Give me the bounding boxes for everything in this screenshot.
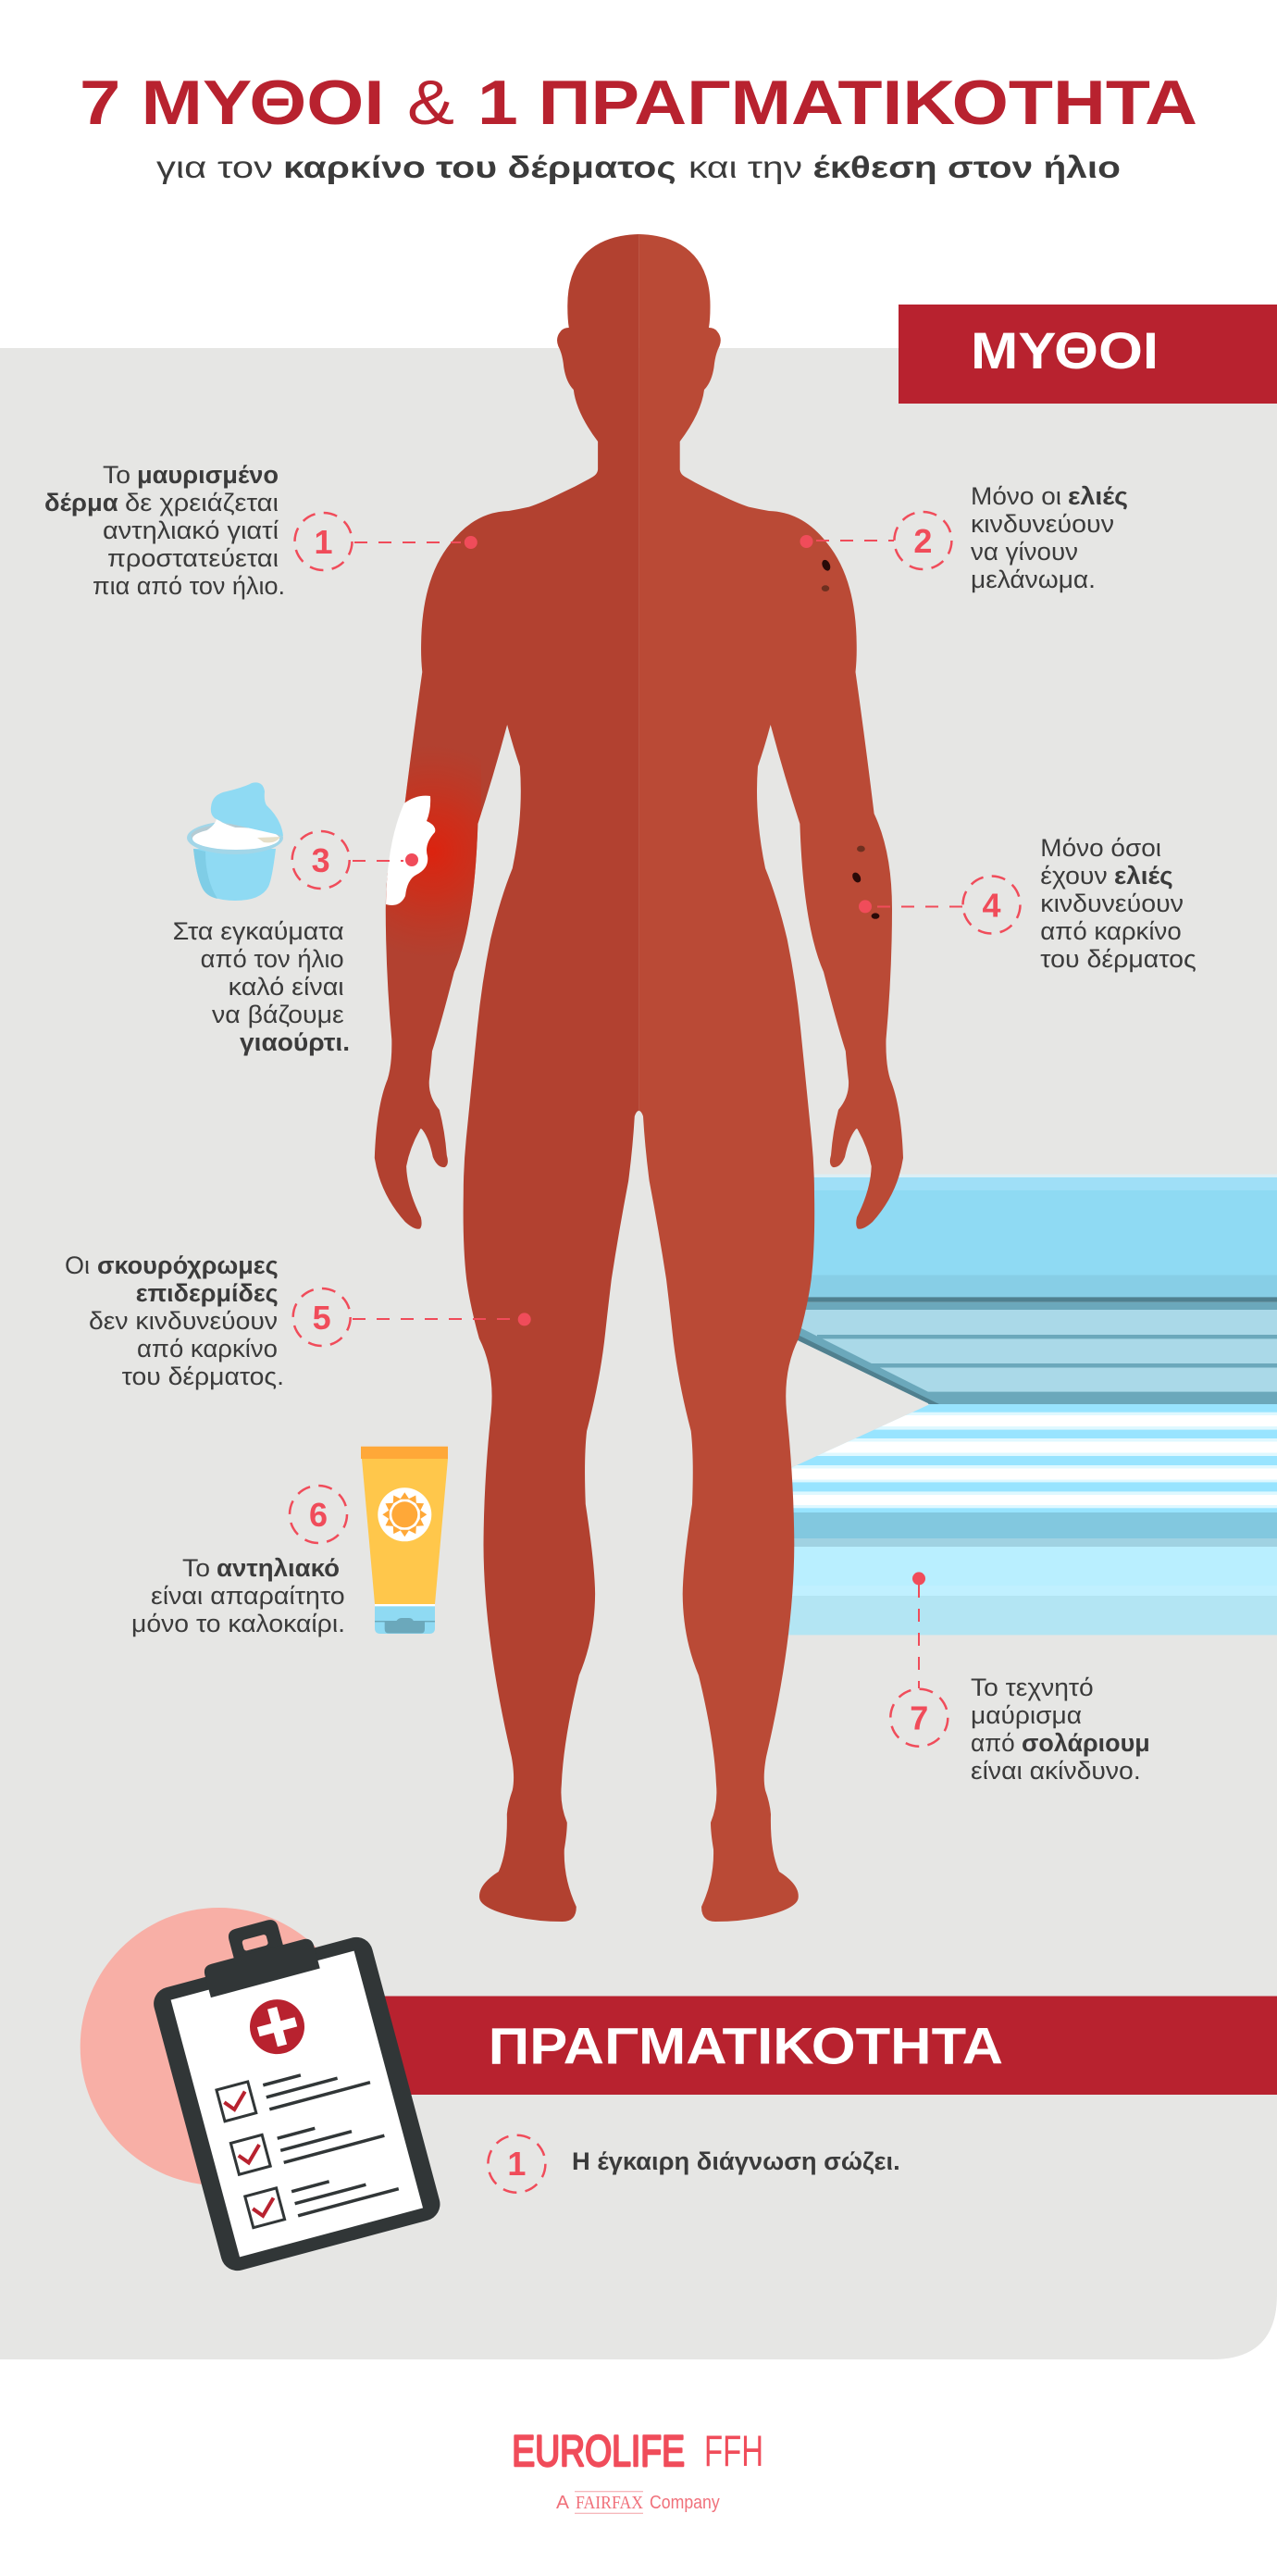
myth 7: marker: 7 [910, 1699, 928, 1737]
myth 4: text: από καρκίνο [1040, 917, 1182, 945]
myth 6: text: είναι απαραίτητο [151, 1582, 345, 1610]
icon: yogurt cup [187, 782, 283, 901]
banner: myths heading: ΜΥΘΟΙ [971, 321, 1159, 380]
tagline: A Fairfax Company: A [556, 2493, 570, 2513]
tagline: A Fairfax Company [556, 2492, 720, 2513]
myth 5: text: του δέρματος. [122, 1363, 284, 1390]
myth 2: marker [800, 512, 951, 569]
icon: sunscreen tube [361, 1447, 448, 1634]
myth 4: text [1040, 834, 1196, 973]
myth 1: text [44, 461, 285, 600]
myth 5: text: επιδερμίδες [136, 1279, 279, 1307]
myth 4: text: κινδυνεύουν [1040, 890, 1184, 917]
myth 7: text: από [971, 1729, 1015, 1757]
myth 5: text: σκουρόχρωμες [97, 1251, 279, 1279]
myth 7: text: Το τεχνητό [971, 1674, 1094, 1701]
myth 5: marker [293, 1288, 531, 1346]
icon: medical clipboard [140, 1896, 444, 2274]
myth 6: text: Το [182, 1554, 210, 1582]
myth 7: marker [890, 1572, 948, 1747]
decorative pink circle behind clipboard [81, 1908, 358, 2185]
banner: myths heading [899, 305, 1277, 404]
myth 1: text: δέρμα [44, 489, 118, 516]
myth 2: text: ελιές [1068, 482, 1128, 510]
subtitle: καρκίνο του δέρματος [283, 150, 676, 184]
subtitle: έκθεση στον ήλιο [812, 150, 1121, 184]
moles on forearm [850, 846, 879, 919]
myth 5: marker: 5 [313, 1299, 331, 1337]
myth 3: text: από τον ήλιο [201, 945, 344, 973]
myth 7: text: είναι ακίνδυνο. [971, 1757, 1141, 1785]
myth 3: marker: 3 [312, 841, 330, 879]
tagline: A Fairfax Company: FAIRFAX [576, 2493, 643, 2513]
panel: grey background [0, 348, 1277, 2359]
logo: Eurolife FFH: FFH [704, 2426, 763, 2475]
subtitle [156, 150, 1121, 184]
logo: Eurolife FFH: EUROLIFE [512, 2426, 685, 2475]
reality 1: marker: 1 [507, 2145, 526, 2183]
moles on shoulder [821, 558, 832, 591]
myth 1: marker [294, 513, 477, 570]
myth 4: text: ελιές [1114, 862, 1173, 890]
subtitle: για τον [156, 150, 273, 184]
myth 6: text [131, 1554, 345, 1637]
myth 5: text [65, 1251, 284, 1390]
myth 6: text: αντηλιακό [217, 1554, 340, 1582]
myth 4: marker: 4 [982, 887, 1001, 924]
title [80, 68, 1197, 138]
banner: reality heading: ΠΡΑΓΜΑΤΙΚΟΤΗΤΑ [489, 2016, 1003, 2074]
tagline: A Fairfax Company: Company [650, 2493, 720, 2513]
myth 3: text [173, 917, 350, 1056]
myth 1: text: μαυρισμένο [137, 461, 279, 489]
myth 3: marker [292, 831, 418, 889]
myth 1: marker: 1 [314, 523, 333, 561]
myth 4: text: Μόνο όσοι [1040, 834, 1161, 862]
myth 7: text [971, 1674, 1150, 1785]
myth 2: marker: 2 [913, 522, 932, 560]
myth 3: text: Στα εγκαύματα [173, 917, 344, 945]
myth 4: text: του δέρματος [1040, 945, 1196, 973]
illustration: tanning bed [782, 1175, 1277, 1635]
myth 7: text: μαύρισμα [971, 1701, 1082, 1729]
myth 3: text: γιαούρτι. [240, 1028, 350, 1056]
myth 5: text: από καρκίνο [137, 1335, 278, 1363]
myth 7: text: σολάριουμ [1022, 1729, 1150, 1757]
myth 6: text: μόνο το καλοκαίρι. [131, 1610, 345, 1637]
myth 2: text: κινδυνεύουν [971, 510, 1114, 538]
title: & [407, 68, 454, 138]
myth 1: text: αντηλιακό γιατί [103, 516, 279, 544]
myth 3: text: καλό είναι [229, 973, 344, 1001]
myth 1: text: προστατεύεται [107, 544, 279, 572]
subtitle: και την [688, 150, 802, 184]
myth 3: text: να βάζουμε [212, 1001, 344, 1028]
myth 1: text: δε χρειάζεται [125, 489, 279, 516]
myth 2: text: να γίνουν [971, 538, 1078, 566]
myth 5: text: δεν κινδυνεύουν [89, 1307, 278, 1335]
myth 6: marker: 6 [309, 1496, 328, 1534]
figure: human body silhouette [352, 234, 903, 1922]
myth 2: text: μελάνωμα. [971, 566, 1096, 593]
title: 1 ΠΡΑΓΜΑΤΙΚΟΤΗΤΑ [477, 68, 1197, 138]
myth 6: marker [290, 1486, 347, 1543]
reality 1: marker [488, 2135, 545, 2193]
myth 1: text: πια από τον ήλιο. [93, 572, 285, 600]
myth 4: text: έχουν [1040, 862, 1108, 890]
myth 4: marker [859, 876, 1020, 933]
banner: reality heading [370, 1996, 1277, 2095]
title: 7 ΜΥΘΟΙ [80, 68, 385, 138]
reality 1: text: Η έγκαιρη διάγνωση σώζει. [572, 2147, 900, 2175]
myth 1: text: Το [103, 461, 130, 489]
myth 2: text [971, 482, 1128, 593]
icon: sunburn patch [386, 796, 435, 905]
myth 5: text: Οι [65, 1251, 90, 1279]
myth 2: text: Μόνο οι [971, 482, 1061, 510]
